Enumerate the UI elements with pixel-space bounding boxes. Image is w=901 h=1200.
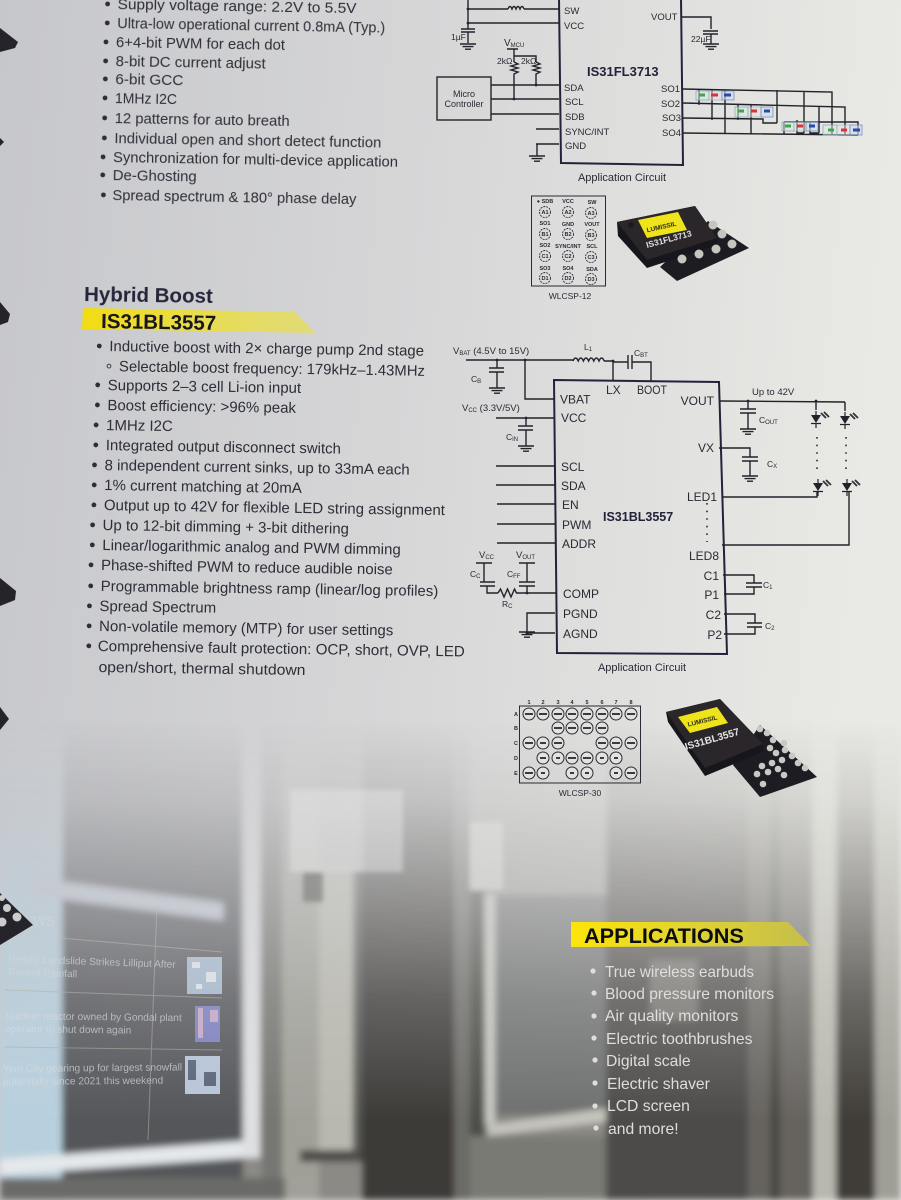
circuit diagram: IS31BL3557 application circuit: ADDR	[562, 537, 596, 551]
circuit diagram: IS31BL3557 application circuit: OUT	[522, 555, 535, 561]
applications list: True wireless earbuds	[605, 964, 754, 981]
package diagram: WLCSP-12: B2	[564, 232, 572, 238]
circuit diagram: IS31BL3557 application circuit: PGND	[563, 607, 598, 621]
applications list: Air quality monitors	[605, 1008, 739, 1025]
circuit diagram: IS31FL3713 application circuit: VCC	[564, 21, 584, 32]
circuit diagram: IS31FL3713 application circuit: 1µF	[451, 32, 466, 42]
applications banner: APPLICATIONS	[584, 923, 744, 948]
circuit diagram: IS31BL3557 application circuit: 1	[769, 585, 773, 591]
feature list: IS31BL3557: Output up to 42V for flexible LED string assignment	[104, 497, 446, 519]
circuit diagram: IS31BL3557 application circuit: P1	[704, 588, 719, 602]
package diagram: WLCSP-30: A	[514, 712, 518, 718]
heading: Hybrid Boost: Hybrid Boost	[84, 283, 213, 308]
applications list	[590, 964, 774, 1138]
chip photo: IS31FL3713	[617, 206, 749, 281]
circuit diagram: IS31BL3557 application circuit: 2	[771, 626, 775, 632]
applications list: Blood pressure monitors	[605, 986, 774, 1003]
package diagram: WLCSP-12: SW	[588, 200, 597, 206]
chip photo: IS31FL3713: LUMISSIL	[646, 221, 677, 234]
circuit diagram: IS31BL3557 application circuit: C	[765, 621, 771, 631]
circuit diagram: IS31BL3557 application circuit: C	[759, 415, 765, 425]
circuit diagram: IS31FL3713 application circuit: VOUT	[651, 12, 678, 23]
package diagram: WLCSP-12: A3	[587, 211, 595, 217]
feature list: first device: 12 patterns for auto breath	[115, 110, 290, 130]
hotel-lobby wall screen news list: potentially since 2021 this weekend	[3, 1076, 164, 1088]
circuit diagram: IS31BL3557 application circuit: CC	[468, 408, 478, 414]
package diagram: WLCSP-12: SO2	[539, 243, 551, 249]
applications list: Digital scale	[606, 1053, 691, 1070]
circuit diagram: IS31BL3557 application circuit: LED8	[689, 549, 719, 563]
circuit diagram: IS31FL3713 application circuit: 2kΩ	[521, 56, 536, 66]
circuit diagram: IS31BL3557 application circuit: C	[471, 374, 477, 384]
circuit diagram: IS31BL3557 application circuit: X	[773, 464, 777, 470]
circuit diagram: IS31FL3713 application circuit: IS31FL3713	[587, 64, 659, 79]
circuit diagram: IS31FL3713 application circuit: V	[504, 38, 511, 49]
feature list: first device: Spread spectrum & 180° phase delay	[112, 187, 357, 208]
package diagram: WLCSP-12: A2	[564, 210, 572, 216]
package diagram: WLCSP-12: B3	[587, 233, 595, 239]
package diagram: WLCSP-12: SCL	[586, 244, 598, 250]
circuit diagram: IS31BL3557 application circuit: V	[516, 550, 522, 561]
package diagram: WLCSP-30: 4	[570, 700, 574, 706]
circuit diagram: IS31BL3557 application circuit: C	[634, 348, 640, 358]
circuit diagram: IS31BL3557 application circuit: IN	[512, 437, 518, 443]
applications list: Electric shaver	[607, 1076, 710, 1093]
circuit diagram: IS31FL3713 application circuit: SCL	[565, 97, 583, 108]
circuit diagram: IS31BL3557 application circuit: C	[508, 604, 513, 610]
package diagram: WLCSP-12: WLCSP-12	[549, 291, 592, 301]
circuit diagram: IS31BL3557 application circuit: FF	[513, 574, 521, 580]
feature list: IS31BL3557: 1% current matching at 20mA	[104, 477, 302, 497]
circuit diagram: IS31BL3557 application circuit	[453, 342, 860, 674]
circuit diagram: IS31BL3557 application circuit: VOUT	[681, 394, 715, 408]
package diagram: WLCSP-12: D1	[541, 276, 549, 282]
part number banner: IS31BL3557: IS31BL3557	[101, 310, 216, 335]
chip photo: IS31BL3557	[666, 699, 817, 797]
feature list: first device: Synchronization for multi-device application	[113, 149, 398, 171]
package diagram: WLCSP-30: 2	[541, 700, 545, 706]
feature list: first device: 6-bit GCC	[115, 71, 184, 89]
feature list: first device: Ultra-low operational current 0.8mA (Typ.)	[117, 15, 385, 37]
package diagram: WLCSP-30: B	[514, 726, 518, 732]
circuit diagram: IS31FL3713 application circuit: 2kΩ	[497, 56, 512, 66]
package diagram: WLCSP-12: C2	[564, 254, 572, 260]
circuit diagram: IS31BL3557 application circuit: IS31BL3557	[603, 510, 673, 524]
icon: LEDs	[707, 411, 860, 542]
package diagram: WLCSP-12	[532, 196, 606, 301]
applications list: and more!	[608, 1121, 679, 1138]
feature list: first device: Individual open and short detect function	[114, 130, 381, 152]
chip photo: IS31BL3557: LUMISSIL	[687, 714, 718, 729]
feature list: IS31BL3557: 8 independent current sinks, up to 33mA each	[104, 457, 410, 479]
chip photo: IS31BL3557: IS31BL3557	[684, 727, 741, 753]
circuit diagram: IS31BL3557 application circuit: Up to 42V	[752, 387, 795, 398]
hotel-lobby wall screen news list: ws	[32, 910, 55, 930]
circuit diagram: IS31FL3713 application circuit: SDB	[565, 112, 585, 123]
circuit diagram: IS31BL3557 application circuit: AGND	[563, 627, 598, 641]
hotel-lobby wall screen news list: operator to shut down again	[5, 1024, 131, 1037]
circuit diagram: IS31FL3713 application circuit: SO3	[662, 113, 681, 124]
circuit diagram: IS31BL3557 application circuit: C	[507, 569, 513, 579]
feature list: IS31BL3557: Inductive boost with 2× charge pump 2nd stage	[109, 338, 424, 360]
circuit diagram: IS31BL3557 application circuit: R	[502, 599, 508, 609]
circuit diagram: IS31BL3557 application circuit: VBAT	[560, 392, 591, 406]
feature list: IS31BL3557: Phase-shifted PWM to reduce audible noise	[101, 557, 393, 578]
circuit diagram: IS31FL3713 application circuit: SO1	[661, 84, 680, 95]
package diagram: WLCSP-12: SDA	[586, 267, 598, 273]
circuit diagram: IS31BL3557 application circuit: LED1	[687, 490, 717, 504]
circuit diagram: IS31FL3713 application circuit: 22µF	[691, 34, 711, 44]
chip photo: IS31FL3713: IS31FL3713	[645, 228, 693, 250]
package diagram: WLCSP-12: SO3	[539, 266, 551, 272]
circuit diagram: IS31FL3713 application circuit: GND	[565, 141, 586, 152]
package diagram: WLCSP-12: GND	[562, 222, 574, 228]
circuit diagram: IS31FL3713 application circuit	[437, 0, 862, 184]
package diagram: WLCSP-12: SO4	[562, 266, 574, 272]
circuit diagram: IS31BL3557 application circuit: BAT	[459, 351, 471, 357]
circuit diagram: IS31BL3557 application circuit: V	[479, 550, 485, 561]
package diagram: WLCSP-12: VOUT	[584, 222, 600, 228]
circuit diagram: IS31BL3557 application circuit: C	[470, 569, 476, 579]
circuit diagram: IS31FL3713 application circuit: Controller	[444, 99, 484, 109]
applications banner	[571, 922, 811, 948]
applications list: LCD screen	[607, 1098, 690, 1115]
feature list: IS31BL3557: Boost efficiency: >96% peak	[107, 397, 297, 417]
circuit diagram: IS31BL3557 application circuit: P2	[707, 628, 722, 642]
circuit diagram: IS31BL3557 application circuit: C	[506, 432, 512, 442]
circuit diagram: IS31BL3557 application circuit: LX	[606, 383, 621, 397]
package diagram: WLCSP-30	[514, 700, 640, 798]
left-edge chip fragments	[0, 28, 33, 945]
circuit diagram: IS31BL3557 application circuit: SDA	[561, 479, 586, 493]
package diagram: WLCSP-12: C1	[541, 254, 549, 260]
feature list: IS31BL3557: 1MHz I2C	[106, 417, 173, 435]
feature list: first device	[100, 0, 401, 209]
circuit diagram: IS31BL3557 application circuit: (4.5V to 15V)	[471, 346, 529, 357]
background photo: lobby with screen and lamps	[0, 700, 901, 1200]
feature list: IS31BL3557: Comprehensive fault protection: OCP, short, OVP, LED	[98, 638, 465, 660]
circuit diagram: IS31BL3557 application circuit: V	[453, 346, 459, 357]
hotel-lobby wall screen news list: Deadly Landslide Strikes Lilliput After	[8, 954, 176, 971]
circuit diagram: IS31FL3713 application circuit: Application Circuit	[578, 172, 666, 184]
package diagram: WLCSP-12: ● SDB	[537, 199, 553, 205]
package diagram: WLCSP-12: SO1	[539, 221, 551, 227]
feature list: IS31BL3557: Supports 2–3 cell Li-ion input	[108, 377, 302, 397]
package diagram: WLCSP-12: B1	[541, 232, 549, 238]
circuit diagram: IS31BL3557 application circuit: BOOT	[637, 383, 668, 397]
package diagram: WLCSP-30: 7	[614, 700, 618, 706]
circuit diagram: IS31BL3557 application circuit: EN	[562, 498, 579, 512]
package diagram: WLCSP-12: VCC	[562, 199, 574, 205]
circuit diagram: IS31FL3713 application circuit: SDA	[564, 83, 584, 94]
circuit diagram: IS31BL3557 application circuit: Application Circuit	[598, 662, 686, 674]
feature list: IS31BL3557	[86, 338, 470, 681]
circuit diagram: IS31BL3557 application circuit: C	[763, 580, 769, 590]
circuit diagram: IS31FL3713 application circuit: SO2	[661, 99, 680, 110]
feature list: IS31BL3557: Linear/logarithmic analog and PWM dimming	[102, 537, 401, 558]
circuit diagram: IS31FL3713 application circuit: Micro	[453, 89, 475, 99]
feature list: IS31BL3557: open/short, thermal shutdown	[98, 659, 306, 679]
feature list: IS31BL3557: Up to 12-bit dimming + 3-bit dithering	[102, 517, 349, 538]
part number banner: IS31BL3557	[82, 308, 315, 335]
applications list: Electric toothbrushes	[606, 1031, 753, 1048]
circuit diagram: IS31BL3557 application circuit: C1	[704, 569, 719, 583]
package diagram: WLCSP-30: 3	[556, 700, 560, 706]
circuit diagram: IS31BL3557 application circuit: CC	[485, 555, 495, 561]
hotel-lobby wall screen news list	[3, 905, 222, 1140]
circuit diagram: IS31BL3557 application circuit: C2	[706, 608, 721, 622]
circuit diagram: IS31BL3557 application circuit: BT	[640, 353, 648, 359]
circuit diagram: IS31BL3557 application circuit: PWM	[562, 518, 591, 532]
package diagram: WLCSP-30: 1	[527, 700, 531, 706]
package diagram: WLCSP-12: D2	[564, 276, 572, 282]
hotel-lobby wall screen news list: Nuclear reactor owned by Gondal plant	[5, 1011, 182, 1024]
circuit diagram: IS31FL3713 application circuit: SYNC/INT	[565, 127, 610, 138]
package diagram: WLCSP-30: 8	[629, 700, 633, 706]
circuit diagram: IS31BL3557 application circuit: COMP	[563, 587, 599, 601]
feature list: first device: De-Ghosting	[113, 167, 197, 185]
circuit diagram: IS31BL3557 application circuit: V	[462, 403, 468, 414]
package diagram: WLCSP-30: WLCSP-30	[559, 788, 602, 798]
circuit diagram: IS31BL3557 application circuit: OUT	[765, 420, 778, 426]
circuit diagram: IS31BL3557 application circuit: (3.3V/5V)	[477, 403, 520, 414]
package diagram: WLCSP-30: D	[514, 756, 518, 762]
package diagram: WLCSP-30: 5	[585, 700, 589, 706]
circuit diagram: IS31FL3713 application circuit: SO4	[662, 128, 681, 139]
package diagram: WLCSP-12: C3	[587, 255, 595, 261]
package diagram: WLCSP-30: E	[514, 771, 518, 777]
feature list: IS31BL3557: Non-volatile memory (MTP) for user settings	[99, 618, 393, 639]
package diagram: WLCSP-12: D3	[587, 277, 595, 283]
hotel-lobby wall screen news list: Recent Rainfall	[8, 967, 77, 980]
package diagram: WLCSP-30: 6	[600, 700, 604, 706]
package diagram: WLCSP-12: A1	[541, 210, 549, 216]
feature list: IS31BL3557: Selectable boost frequency: 179kHz–1.43MHz	[119, 358, 425, 380]
circuit diagram: IS31BL3557 application circuit: L	[584, 342, 589, 352]
hotel-lobby wall screen news list: Yem City gearing up for largest snowfall	[3, 1062, 182, 1075]
circuit diagram: IS31BL3557 application circuit: 1	[589, 347, 593, 353]
package diagram: WLCSP-12: SYNC/INT	[555, 244, 581, 250]
circuit diagram: IS31FL3713 application circuit: SW	[564, 6, 579, 17]
wall lamps	[290, 790, 503, 902]
feature list: IS31BL3557: Spread Spectrum	[99, 598, 216, 617]
feature list: IS31BL3557: Programmable brightness ramp (linear/log profiles)	[101, 578, 438, 600]
circuit diagram: IS31BL3557 application circuit: C	[476, 574, 481, 580]
feature list: IS31BL3557: Integrated output disconnect switch	[106, 437, 341, 458]
circuit diagram: IS31BL3557 application circuit: VCC	[561, 411, 587, 425]
package diagram: WLCSP-30: C	[514, 741, 518, 747]
feature list: first device: 6+4-bit PWM for each dot	[116, 34, 286, 54]
circuit diagram: IS31FL3713 application circuit: MCU	[511, 43, 524, 49]
circuit diagram: IS31BL3557 application circuit: VX	[698, 441, 714, 455]
circuit diagram: IS31BL3557 application circuit: B	[477, 379, 481, 385]
circuit diagram: IS31BL3557 application circuit: C	[767, 459, 773, 469]
feature list: first device: 8-bit DC current adjust	[115, 53, 267, 73]
circuit diagram: IS31BL3557 application circuit: SCL	[561, 460, 585, 474]
feature list: first device: 1MHz I2C	[115, 90, 177, 108]
